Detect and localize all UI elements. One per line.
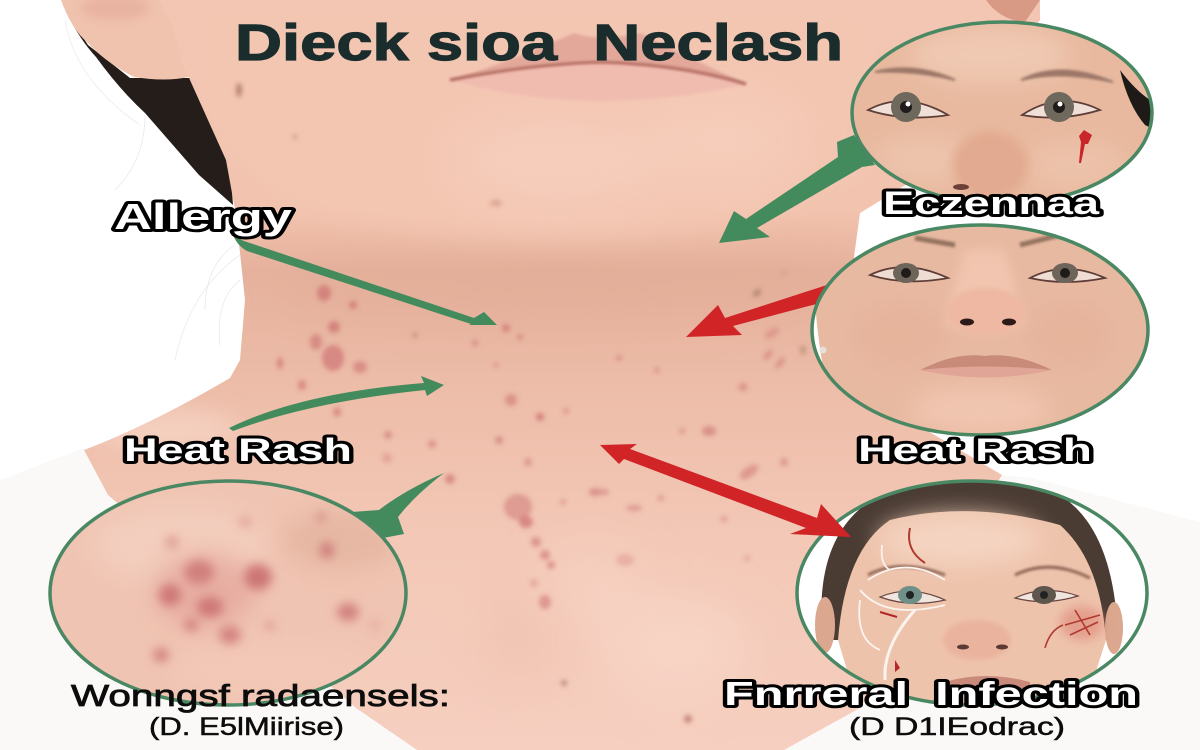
label: heat rash right: Heat Rash [858,432,1092,468]
dark hair behind the ear [65,10,233,205]
neck rash spots [236,83,806,723]
label: lower left heading: Wonngsf radaensels: [71,678,450,713]
panel: fungal infection face circle [797,480,1147,720]
label: heat rash left: Heat Rash [124,432,352,468]
arrow: red double-headed [600,444,851,537]
lips [450,33,746,101]
panel: heat rash face circle [805,225,1148,440]
second ear, top right [986,0,1040,22]
ear [61,0,189,80]
label: eczema: Eczennaa [883,185,1099,221]
arrow: red, upper right [686,283,833,337]
arrow: eczema [719,135,875,243]
sublabel: fungal infection: (D D1IEodrac) [849,713,1065,741]
loose hair strands [65,20,240,360]
label: allergy: Allergy [114,196,292,237]
title: Dieck sioa Neclash [235,14,843,71]
panel: eczema face circle [852,22,1155,204]
arrow: allergy [232,232,497,325]
arrow: lower-left circle [352,473,444,538]
white shirt [0,448,1200,750]
label: fungal infection: Fnrreral Infection [724,675,1138,712]
person: skin of face, neck and shoulders [84,0,1040,750]
arrow: heat rash left [229,376,444,431]
panel: rash close-up circle [50,481,406,705]
sublabel: lower left: (D. E5lMiirise) [149,713,344,741]
